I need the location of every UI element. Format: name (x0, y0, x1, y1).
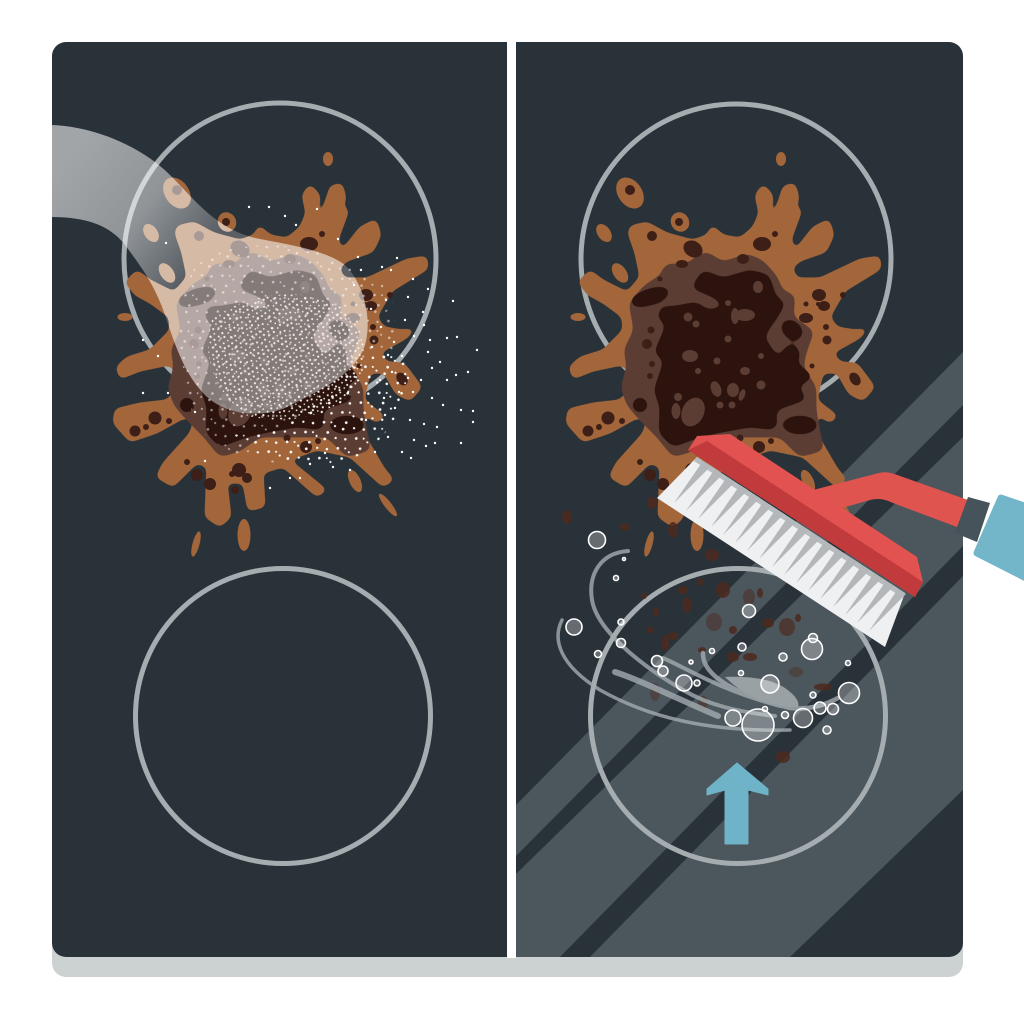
left top burner ring (124, 103, 436, 415)
left burnt stain (113, 152, 428, 557)
panel: left, baking soda on the stain (52, 42, 507, 957)
brush head shaded side (688, 441, 923, 597)
cooktop base edge (52, 900, 963, 977)
right burnt stain (566, 152, 881, 557)
handle collar (955, 497, 990, 542)
right top burner ring (581, 104, 891, 414)
soap bubbles (566, 532, 860, 741)
left cooktop surface (52, 42, 507, 957)
soapy residue patch (725, 677, 798, 707)
translucent liquid stream (52, 125, 368, 414)
loosened stain debris (562, 497, 832, 763)
soapy swirl marks (558, 551, 838, 730)
icon: scrub brush (657, 434, 1024, 647)
baking soda: scattered speckles (143, 207, 477, 488)
right cooktop surface (516, 42, 963, 957)
panel: right, scrubbing the stain (516, 42, 1024, 957)
wetted stain under the liquid (143, 178, 368, 414)
blue handle grip (977, 498, 1024, 580)
divider between panels (507, 42, 516, 958)
baking soda: dense speckles (179, 245, 410, 465)
brush head (688, 434, 923, 597)
brush bristles (657, 457, 906, 647)
diagonal light reflections (516, 352, 963, 957)
arrow: scrub direction (707, 763, 768, 844)
brush handle arm (813, 472, 968, 527)
left bottom burner ring (136, 568, 430, 864)
right bottom burner ring (590, 568, 886, 864)
